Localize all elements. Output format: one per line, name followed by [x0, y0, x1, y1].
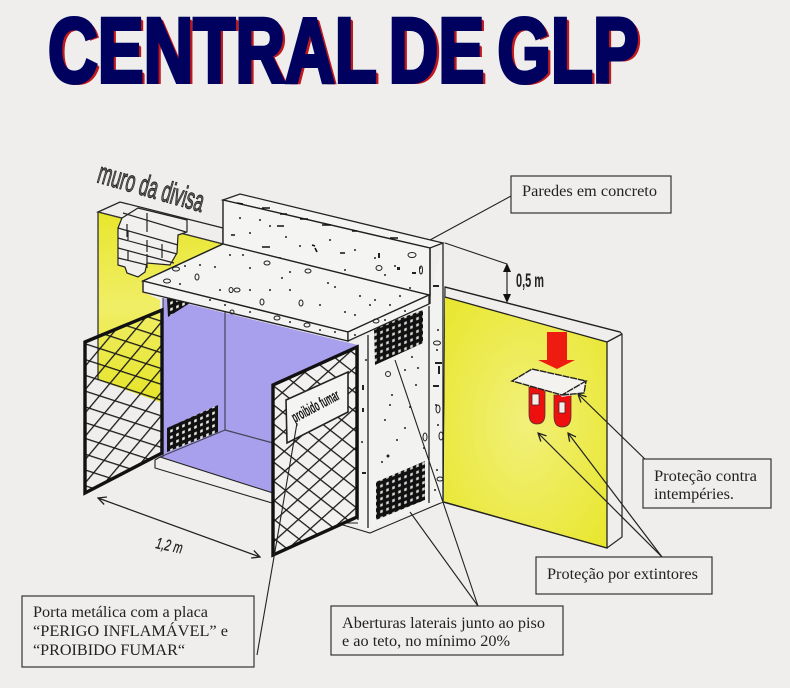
interior of the shelter — [160, 298, 358, 493]
dimension: 0,5 m: 0,5 m — [516, 271, 544, 292]
dimension: 1,2 m: 1,2 m — [154, 535, 184, 558]
concrete roof slab — [143, 244, 429, 341]
callout: porta metalica: “PERIGO INFLAMÁVEL” e — [33, 623, 228, 640]
callout: protecao contra intemperies: Proteção contra — [654, 468, 757, 485]
exposed bricks — [118, 208, 187, 277]
dimension: 1,2 m — [98, 498, 260, 558]
left open mesh door — [85, 310, 162, 493]
callout: paredes em concreto: Paredes em concreto — [522, 183, 657, 200]
left upper vent — [167, 298, 190, 317]
callout: porta metalica: “PROIBIDO FUMAR“ — [33, 642, 185, 659]
icon: red arrow — [538, 332, 575, 369]
callout: aberturas laterais: e ao teto, no mínimo 20% — [342, 633, 510, 650]
boundary wall left — [98, 202, 223, 402]
label: muro da divisa: muro da divisa — [94, 157, 208, 219]
callout: porta metalica — [22, 423, 297, 667]
concrete base — [155, 457, 443, 533]
callout: aberturas laterais — [331, 360, 563, 655]
side lower vent — [376, 461, 425, 520]
dimension: 0,5 m — [445, 243, 544, 303]
weather shelter — [512, 369, 586, 397]
title: CENTRAL DE GLP — [48, 0, 639, 102]
callout: protecao contra intemperies — [578, 394, 771, 508]
raised concrete rear wall — [223, 194, 443, 296]
callout: aberturas laterais: Aberturas laterais junto ao piso — [342, 615, 545, 632]
sign: proibido fumar: proibido fumar — [288, 386, 343, 426]
boundary wall right — [443, 287, 622, 548]
callout: protecao por extintores — [536, 433, 712, 594]
side upper vent — [374, 310, 423, 365]
callout: porta metalica: Porta metálica com a placa — [33, 604, 208, 621]
icon: fire extinguishers — [529, 387, 571, 427]
callout: paredes em concreto — [430, 176, 671, 240]
callout: protecao por extintores: Proteção por extintores — [547, 566, 698, 583]
callout: protecao contra intemperies: intempéries. — [654, 486, 734, 503]
sign: proibido fumar — [286, 372, 348, 443]
right side concrete wall — [358, 243, 443, 530]
right open mesh door — [273, 347, 357, 555]
left interior vent — [167, 405, 218, 452]
